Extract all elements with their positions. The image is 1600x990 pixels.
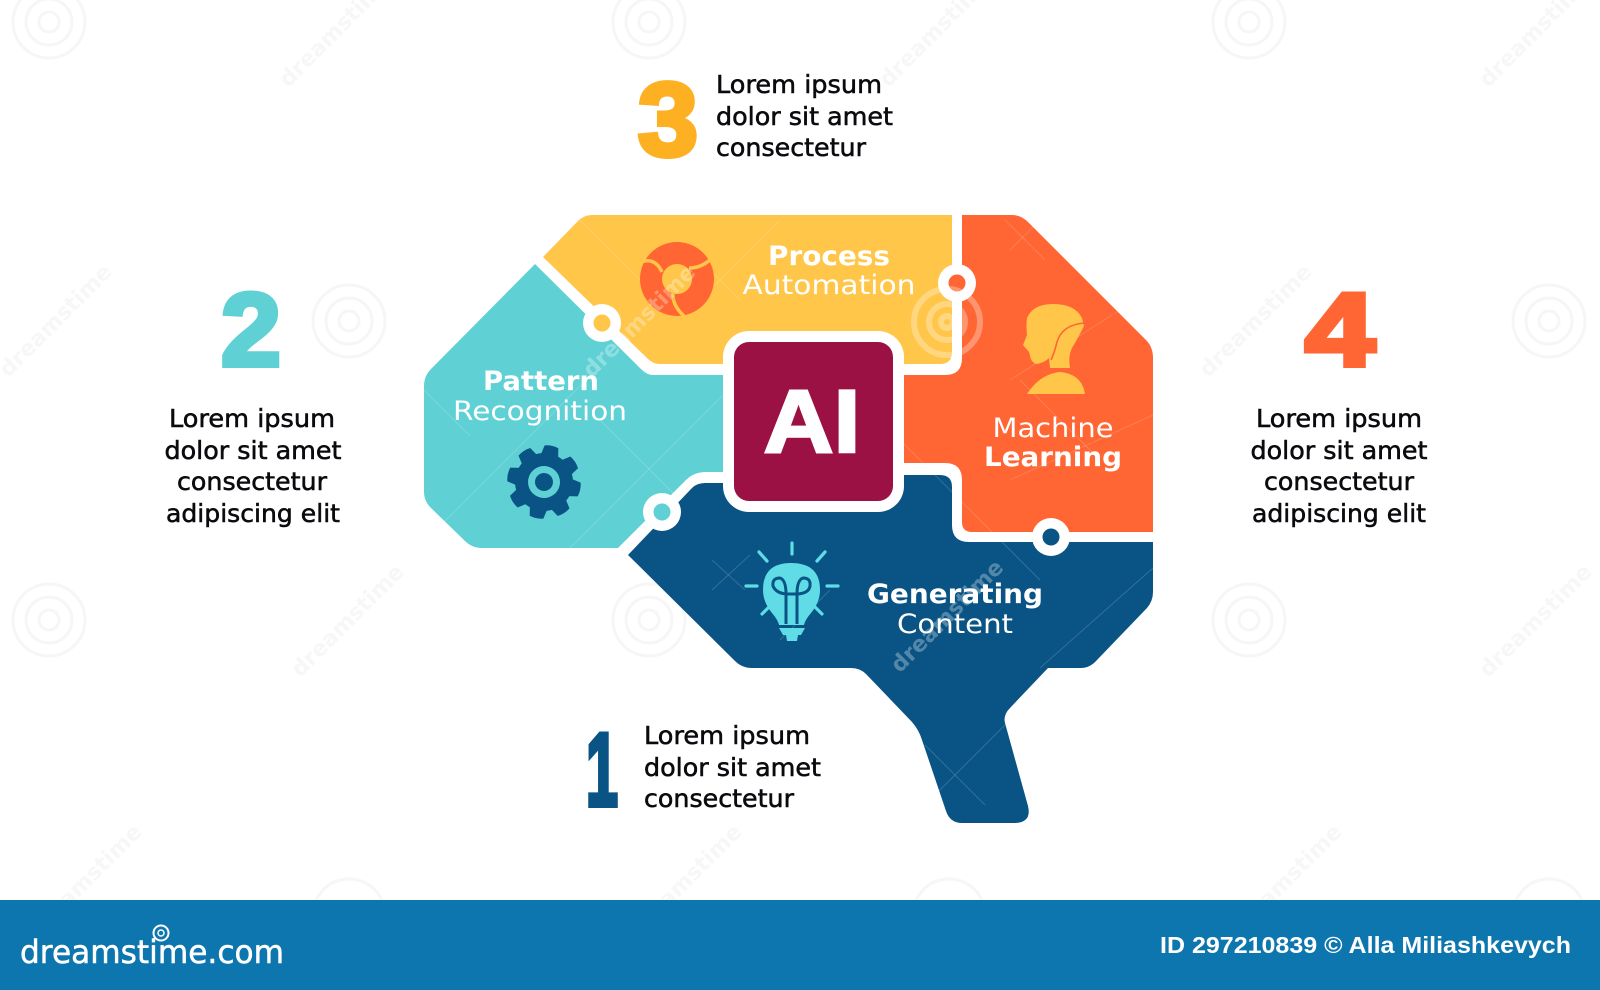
panel: machine learning (orange) [890,215,1153,532]
callout 3: yellow number and text [638,62,893,178]
callout 2: teal number and text: consectetur [177,467,328,496]
label: pattern recognition: Recognition [453,396,627,427]
callout 2: teal number and text: 2 [221,272,281,388]
callout 4: orange number and text: consectetur [1264,467,1415,496]
callout 2: teal number and text [164,272,342,528]
footer logo: dreamstime.com [20,933,284,971]
connector: yellow node [583,304,621,342]
label: machine learning: Learning [984,442,1122,473]
footer credit: ID 297210839 © Alla Miliashkevych [1160,932,1571,958]
callout 2: teal number and text: adipiscing elit [166,499,340,528]
callout 1: navy number and text: consectetur [644,784,795,813]
callout 3: yellow number and text: Lorem ipsum [716,70,882,99]
callout 1: navy number and text: Lorem ipsum [644,721,810,750]
callout 1: navy number and text: 1 [586,712,618,828]
connector: teal node [643,493,681,531]
callout 3: yellow number and text: consectetur [716,133,867,162]
text: dreamstime [25,820,147,942]
label: machine learning [984,413,1122,473]
callout 4: orange number and text: 4 [1305,272,1375,388]
icon: gear [500,438,588,526]
panel: generating content (navy) [628,475,1153,823]
callout 4: orange number and text: Lorem ipsum [1256,404,1422,433]
footer bar [0,900,1600,990]
callout 2: teal number and text: Lorem ipsum [169,404,335,433]
label: process automation [742,241,916,301]
callout 1: navy number and text: dolor sit amet [644,753,821,782]
connector: navy node [1032,518,1070,556]
text: dreamstime [625,820,747,942]
icon: head profile [1023,304,1085,394]
brain diagram [424,215,1153,823]
panel: pattern recognition (teal) [424,264,740,548]
text: dreamstime [287,560,409,682]
callout 4: orange number and text: dolor sit amet [1250,436,1428,465]
icon: process cycle [640,242,714,316]
text: dreamstime [1195,260,1317,382]
text: dreamstime [1475,560,1597,682]
label: pattern recognition: Pattern [483,366,599,397]
label: pattern recognition [453,366,627,427]
text: dreamstime [886,555,1009,678]
center AI chip: AI [764,371,860,471]
connector: orange node [938,264,976,302]
callout 3: yellow number and text: 3 [638,62,698,178]
callout 1: navy number and text [586,712,821,828]
label: generating content [867,579,1043,640]
label: generating content: Content [897,609,1013,640]
label: process automation: Automation [742,270,916,301]
panel: process automation (yellow) [543,215,952,364]
text: dreamstime [578,260,701,383]
callout 3: yellow number and text: dolor sit amet [716,102,893,131]
callout 2: teal number and text: dolor sit amet [164,436,342,465]
label: generating content: Generating [867,579,1043,610]
text: dreamstime [1225,820,1347,942]
callout 4: orange number and text [1250,272,1428,528]
center AI chip [723,331,904,512]
label: process automation: Process [768,241,890,272]
callout 4: orange number and text: adipiscing elit [1252,499,1426,528]
icon: light bulb [746,543,838,641]
label: machine learning: Machine [992,413,1114,444]
